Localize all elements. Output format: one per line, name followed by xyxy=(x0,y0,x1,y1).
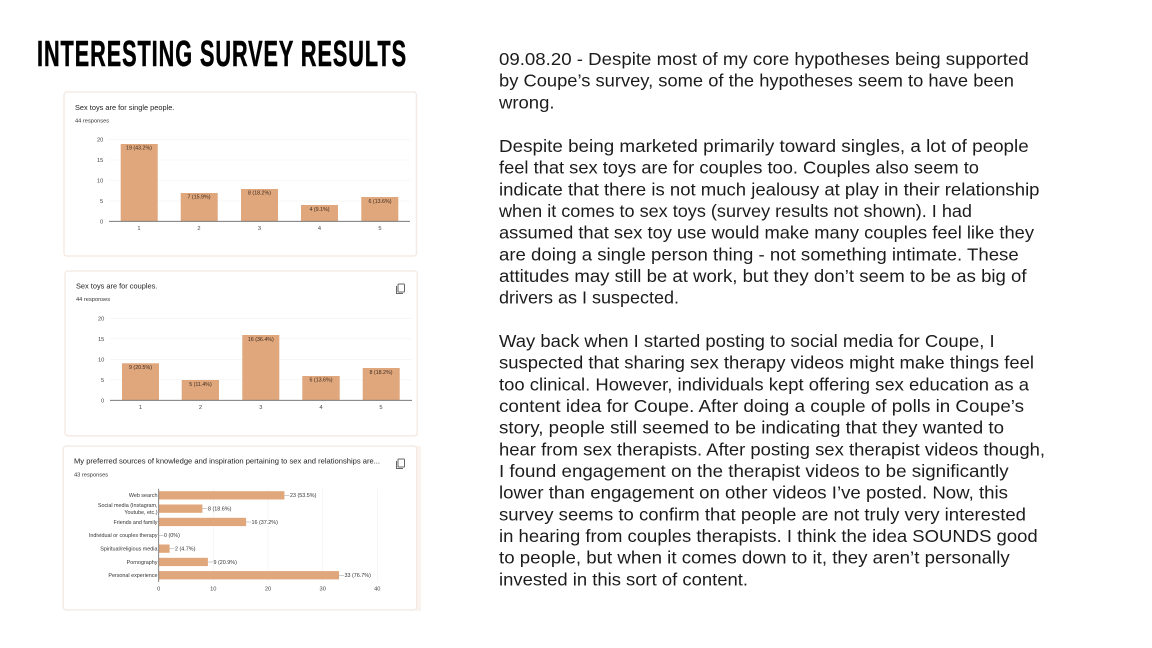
bar chart: single people: 6 (13.6%) xyxy=(369,199,392,205)
chart heading: My preferred sources of knowledge and inspiration pertaining to sex and relationships are... xyxy=(74,456,380,466)
paragraph: introduction: 09.08.20 - Despite most of my core hypotheses being supported xyxy=(499,49,1029,69)
horizontal bar chart: sources: Spiritual/religious media xyxy=(100,546,158,552)
paragraph: sex therapy content: content idea for Coupe. After doing a couple of polls in Coupe’s xyxy=(499,396,1024,416)
bar chart: single people: 8 (18.2%) xyxy=(248,190,271,196)
bar chart: couples: 5 xyxy=(379,405,383,411)
paragraph: sex therapy content: Way back when I started posting to social media for Coupe, I xyxy=(499,331,995,351)
bar chart: single people: 3 xyxy=(258,226,261,232)
paragraph: couples and sex toys: indicate that there is not much jealousy at play in their relationship xyxy=(499,179,1040,199)
chart heading: Sex toys are for couples. xyxy=(76,282,157,290)
horizontal bar chart: sources: 33 (76.7%) xyxy=(344,573,371,579)
paragraph: sex therapy content: in hearing from couples therapists. I think the idea SOUNDS good xyxy=(499,526,1038,546)
paragraph: introduction: wrong. xyxy=(498,92,554,112)
paragraph: sex therapy content: invested in this sort of content. xyxy=(499,569,748,589)
paragraph: couples and sex toys: attitudes may still be at work, but they don’t seem to be as big of xyxy=(499,266,1027,286)
paragraph: couples and sex toys: assumed that sex toy use would make many couples feel like they xyxy=(499,223,1034,243)
panel: preferred sources chart xyxy=(63,446,421,611)
bar chart: couples: 4 xyxy=(319,405,323,411)
paragraph: sex therapy content: survey seems to confirm that people are not truly very interested xyxy=(499,504,1026,524)
response count: 44 responses xyxy=(75,118,109,124)
paragraph: couples and sex toys xyxy=(498,136,1040,308)
horizontal bar chart: sources: 23 (53.5%) xyxy=(290,493,317,499)
horizontal bar chart: sources: 0 xyxy=(157,586,160,592)
horizontal bar chart: sources: 2 (4.7%) xyxy=(175,546,196,552)
title: INTERESTING SURVEY RESULTS xyxy=(37,33,407,74)
horizontal bar chart: sources: Pornography xyxy=(127,560,158,566)
paragraph: introduction: by Coupe’s survey, some of the hypotheses seem to have been xyxy=(499,71,1014,91)
bar chart: couples: 20 xyxy=(98,316,104,322)
bar chart: single people: 5 xyxy=(100,199,103,205)
horizontal bar chart: sources: 16 (37.2%) xyxy=(252,520,278,526)
bar chart: single people: 15 xyxy=(97,158,103,164)
bar chart: single people: 10 xyxy=(97,178,103,184)
paragraph: couples and sex toys: are doing a single person thing - not something intimate. These xyxy=(499,244,1019,264)
bar chart: couples: 5 (11.4%) xyxy=(189,382,212,388)
horizontal bar chart: sources: Youtube, etc.) xyxy=(124,510,158,516)
horizontal bar chart: sources: Social media (Instagram, xyxy=(98,503,158,509)
bar chart: couples: 3 xyxy=(259,405,262,411)
bar chart: single people: 4 xyxy=(318,226,321,232)
bar chart: single people xyxy=(97,138,410,232)
response count: 44 responses xyxy=(76,297,110,303)
bar chart: couples: 9 (20.5%) xyxy=(129,365,152,371)
horizontal bar chart: sources: Personal experience xyxy=(108,573,158,579)
bar chart: couples: 8 (18.2%) xyxy=(370,370,393,376)
horizontal bar chart: sources: 20 xyxy=(265,586,271,592)
bar chart: couples: 5 xyxy=(101,378,104,384)
paragraph: sex therapy content: suspected that sharing sex therapy videos might make things feel xyxy=(499,353,1034,373)
chart heading: Sex toys are for single people. xyxy=(75,103,174,112)
paragraph: sex therapy content: too clinical. However, individuals kept offering sex education as a xyxy=(499,374,1029,394)
horizontal bar chart: sources: 8 (18.6%) xyxy=(208,506,232,512)
bar chart: single people: 20 xyxy=(97,138,103,144)
paragraph: couples and sex toys: drivers as I suspected. xyxy=(499,288,679,308)
paragraph: sex therapy content: I found engagement on the therapist videos to be significantly xyxy=(499,461,1009,481)
paragraph: sex therapy content: hear from sex therapists. After posting sex therapist videos though, xyxy=(499,439,1045,459)
bar chart: couples: 10 xyxy=(98,357,104,363)
horizontal bar chart: sources: 40 xyxy=(374,586,380,592)
bar chart: couples: 0 xyxy=(101,398,104,404)
icon: copy xyxy=(396,284,404,294)
horizontal bar chart: sources xyxy=(89,489,380,592)
paragraph: couples and sex toys: when it comes to sex toys (survey results not shown). I had xyxy=(498,201,972,221)
panel: sex toys are for couples chart xyxy=(65,271,417,436)
text block: commentary xyxy=(498,49,1045,589)
paragraph: sex therapy content xyxy=(499,331,1045,589)
paragraph: sex therapy content: lower than engagement on other videos I’ve posted. Now, this xyxy=(499,483,1008,503)
panel: sex toys are for single people chart xyxy=(64,92,416,256)
bar chart: single people: 5 xyxy=(378,226,382,232)
paragraph: sex therapy content: story, people still seemed to be indicating that they wanted to xyxy=(499,418,1004,438)
bar chart: single people: 7 (15.9%) xyxy=(188,194,211,200)
bar chart: single people: 0 xyxy=(100,219,103,225)
horizontal bar chart: sources: Individual or couples therapy xyxy=(89,533,158,539)
bar chart: single people: 1 xyxy=(137,226,141,232)
icon: copy xyxy=(396,459,404,468)
bar chart: couples: 1 xyxy=(139,405,142,411)
horizontal bar chart: sources: 30 xyxy=(320,586,326,592)
horizontal bar chart: sources: 0 (0%) xyxy=(164,533,180,539)
paragraph: introduction xyxy=(498,49,1029,112)
bar chart: couples: 2 xyxy=(199,405,202,411)
paragraph: couples and sex toys: Despite being marketed primarily toward singles, a lot of people xyxy=(499,136,1029,156)
bar chart: single people: 19 (43.2%) xyxy=(126,146,152,152)
response count: 43 responses xyxy=(74,472,108,478)
bar chart: couples: 15 xyxy=(98,337,104,343)
bar chart: single people: 4 (9.1%) xyxy=(309,207,330,213)
bar chart: couples xyxy=(98,316,412,411)
horizontal bar chart: sources: 10 xyxy=(210,586,216,592)
paragraph: sex therapy content: to people, but when it comes down to it, they aren’t personally xyxy=(499,548,1010,568)
bar chart: couples: 6 (13.6%) xyxy=(310,378,333,384)
bar chart: couples: 16 (36.4%) xyxy=(248,337,274,343)
horizontal bar chart: sources: Friends and family xyxy=(113,520,158,526)
paragraph: couples and sex toys: feel that sex toys are for couples too. Couples also seem to xyxy=(499,158,979,178)
horizontal bar chart: sources: Web search xyxy=(129,493,158,499)
horizontal bar chart: sources: 9 (20.9%) xyxy=(214,560,237,566)
bar chart: single people: 2 xyxy=(197,226,201,232)
